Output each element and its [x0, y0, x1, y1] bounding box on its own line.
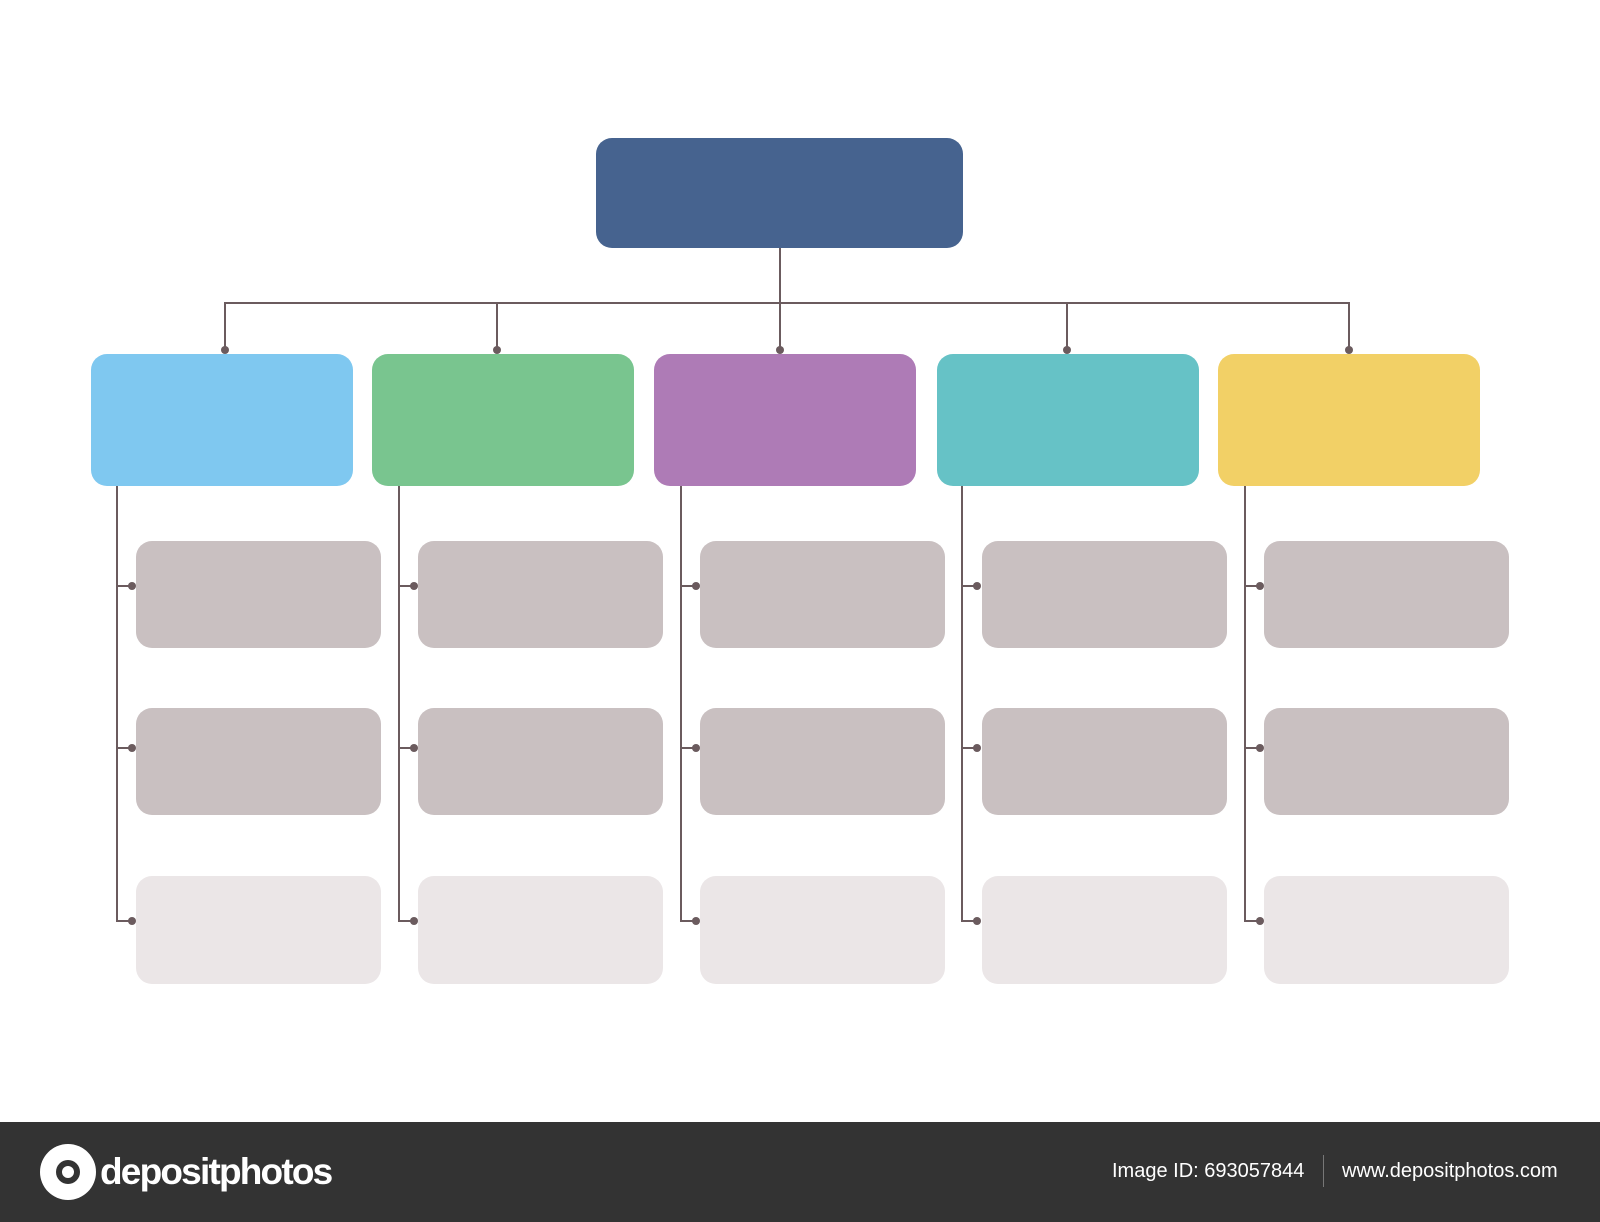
col4 [961, 585, 977, 587]
icon: camera logo [40, 1144, 96, 1200]
col3 [680, 585, 696, 587]
image id: Image ID: 693057844 [1112, 1160, 1304, 1182]
root box [596, 138, 963, 248]
col5 [1244, 585, 1260, 587]
url: www.depositphotos.com [1342, 1160, 1558, 1182]
column boxes [91, 354, 353, 486]
col1 [116, 585, 132, 587]
logo text: depositphotos [100, 1151, 331, 1192]
col2 [398, 585, 414, 587]
footer bar [0, 1122, 1600, 1222]
sub boxes [116, 486, 1272, 925]
